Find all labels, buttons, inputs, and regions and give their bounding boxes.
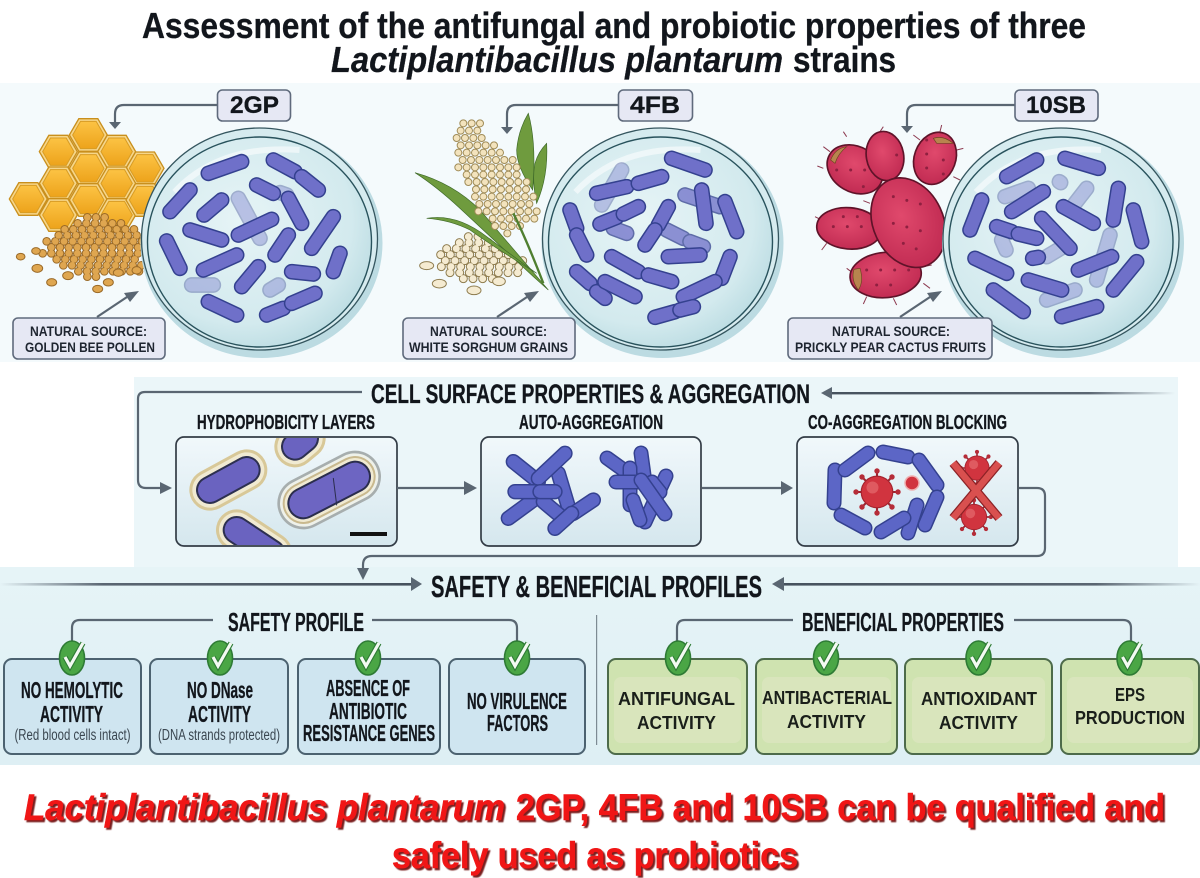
panel: hydrophobicity layers bbox=[176, 412, 397, 553]
card: no hemolytic activity: ACTIVITY bbox=[40, 701, 103, 727]
title: strains bbox=[793, 39, 896, 80]
arrow: source box to sorghum bbox=[497, 291, 539, 317]
label: natural source prickly pear cactus fruits: PRICKLY PEAR CACTUS FRUITS bbox=[795, 339, 986, 355]
icon: honeycomb bbox=[9, 119, 164, 231]
divider bbox=[596, 615, 597, 745]
conclusion text: Lactiplantibacillus plantarum bbox=[24, 787, 505, 828]
arrow: left into heading bbox=[0, 577, 422, 591]
card: no hemolytic activity: (Red blood cells intact) bbox=[14, 727, 130, 744]
conclusion text: safely used as probiotics bbox=[392, 835, 798, 876]
arrow: hydrophobicity to auto-aggregation bbox=[397, 481, 477, 495]
card: antibacterial activity bbox=[756, 659, 897, 754]
icon: petri dish 4FB bbox=[542, 128, 784, 358]
icon: check 3 bbox=[356, 641, 380, 675]
card: antibacterial activity: ANTIBACTERIAL bbox=[762, 688, 892, 708]
arrow: source box to cactus bbox=[900, 291, 942, 317]
bracket line bbox=[72, 620, 517, 644]
heading: CO-AGGREGATION BLOCKING bbox=[808, 412, 1007, 434]
heading: cell surface properties and aggregation: CELL SURFACE PROPERTIES & AGGREGATION bbox=[371, 379, 810, 409]
conclusion text: 2GP, 4FB and 10SB can be qualified and bbox=[516, 787, 1165, 828]
bacteria in dish 10SB bbox=[970, 158, 1142, 317]
heading: BENEFICIAL PROPERTIES bbox=[802, 607, 1004, 637]
arrow: auto-aggregation to co-aggregation bbox=[702, 481, 793, 495]
label: 2GP: 2GP bbox=[230, 92, 279, 119]
bacteria in dish 2GP bbox=[167, 160, 340, 315]
arrow: connector to safety section bbox=[357, 488, 1045, 580]
card: antioxidant activity: ANTIOXIDANT bbox=[921, 689, 1037, 709]
panel: beneficial properties bbox=[608, 607, 1199, 754]
card: no virulence factors: NO VIRULENCE bbox=[467, 688, 567, 714]
label: 2GP bbox=[218, 90, 290, 121]
scale bar bbox=[350, 532, 387, 536]
label: 10SB bbox=[1015, 90, 1098, 121]
card: no DNase activity: (DNA strands protected) bbox=[158, 727, 280, 744]
arrow: feed into hydrophobicity bbox=[138, 392, 362, 494]
icon: prickly pear cactus bbox=[815, 125, 964, 305]
icon: blocked pathogens with red cross bbox=[953, 450, 999, 536]
card: absence of antibiotic resistance genes: ANTIBIOTIC bbox=[329, 698, 407, 724]
label: 10SB: 10SB bbox=[1026, 92, 1086, 119]
title bbox=[142, 5, 1086, 80]
background: cell surface section bbox=[134, 377, 1178, 567]
card: EPS production bbox=[1061, 659, 1199, 754]
icon: bee pollen pile bbox=[16, 217, 144, 293]
label: natural source prickly pear cactus fruits bbox=[788, 318, 992, 359]
title: Assessment of the antifungal and probiotic properties of three bbox=[142, 5, 1086, 46]
icon: small pathogen bbox=[905, 476, 919, 490]
card: antioxidant activity: ACTIVITY bbox=[939, 713, 1018, 733]
heading: HYDROPHOBICITY LAYERS bbox=[197, 412, 375, 434]
card: antifungal activity: ANTIFUNGAL bbox=[618, 689, 735, 709]
icon: check 1 bbox=[60, 641, 84, 675]
arrow: source box to pollen bbox=[97, 291, 139, 317]
icon: petri dish 2GP bbox=[140, 128, 382, 358]
icon: check 8 bbox=[1117, 641, 1142, 675]
card: no DNase activity: NO DNase bbox=[187, 677, 253, 703]
panel: auto-aggregation bbox=[481, 412, 701, 546]
background: safety section bbox=[0, 567, 1200, 765]
card: antifungal activity: ACTIVITY bbox=[637, 713, 716, 733]
arrow: feed from right into heading bbox=[821, 387, 1175, 399]
panel: strain 2GP bbox=[9, 90, 382, 359]
icon: check 6 bbox=[814, 641, 838, 675]
label: natural source golden bee pollen: NATURAL SOURCE: bbox=[30, 323, 147, 339]
card: absence of antibiotic resistance genes bbox=[298, 659, 440, 754]
label: natural source white sorghum grains: WHITE SORGHUM GRAINS bbox=[409, 339, 568, 355]
arrow: 4FB label to source bbox=[501, 105, 618, 134]
title: Lactiplantibacillus plantarum bbox=[331, 39, 783, 80]
box border bbox=[176, 437, 397, 546]
card: antibacterial activity: ACTIVITY bbox=[787, 712, 866, 732]
bracket line bbox=[677, 620, 1131, 644]
heading: AUTO-AGGREGATION bbox=[519, 412, 663, 434]
arrow: 10SB label to source bbox=[901, 105, 1015, 133]
illustration: bacteria with hydrophobic layers bbox=[210, 438, 355, 553]
arrow: 2GP label to source bbox=[109, 105, 217, 129]
panel: safety profile bbox=[4, 607, 585, 754]
label: 4FB bbox=[618, 90, 692, 121]
panel: co-aggregation blocking bbox=[797, 412, 1018, 546]
icon: petri dish 10SB bbox=[942, 128, 1184, 358]
card: no virulence factors: FACTORS bbox=[487, 710, 548, 736]
background: top band bbox=[0, 83, 1200, 362]
label: 4FB: 4FB bbox=[630, 92, 680, 119]
arrow: right into heading bbox=[772, 577, 1200, 591]
card: EPS production: PRODUCTION bbox=[1075, 708, 1185, 728]
illustration: aggregated rods left bbox=[508, 453, 593, 528]
bacteria in dish 4FB bbox=[570, 158, 737, 317]
card: no virulence factors bbox=[449, 659, 585, 754]
panel: strain 4FB bbox=[403, 90, 784, 359]
card: no hemolytic activity: NO HEMOLYTIC bbox=[21, 677, 123, 703]
box bbox=[797, 437, 1018, 546]
panel: strain 10SB bbox=[788, 90, 1184, 359]
card: absence of antibiotic resistance genes: RESISTANCE GENES bbox=[303, 720, 435, 746]
icon: check 7 bbox=[966, 641, 991, 675]
icon: trapped pathogen bbox=[853, 468, 901, 516]
label: natural source white sorghum grains: NATURAL SOURCE: bbox=[430, 323, 547, 339]
icon: check 2 bbox=[208, 641, 232, 675]
illustration: aggregated rods right bbox=[607, 453, 666, 522]
heading: safety and beneficial profiles: SAFETY & BENEFICIAL PROFILES bbox=[431, 569, 762, 604]
label: natural source white sorghum grains bbox=[403, 318, 575, 359]
icon: sorghum plant bbox=[415, 113, 548, 295]
icon: check 5 bbox=[666, 641, 690, 675]
label: natural source golden bee pollen: GOLDEN BEE POLLEN bbox=[25, 339, 155, 355]
box bbox=[481, 437, 701, 546]
card: antioxidant activity bbox=[905, 659, 1052, 754]
card: absence of antibiotic resistance genes: ABSENCE OF bbox=[326, 675, 410, 701]
heading: SAFETY PROFILE bbox=[228, 607, 364, 637]
label: natural source golden bee pollen bbox=[13, 318, 165, 359]
label: natural source prickly pear cactus fruits: NATURAL SOURCE: bbox=[832, 323, 950, 339]
card: no hemolytic activity bbox=[4, 659, 141, 754]
card: no DNase activity bbox=[150, 659, 288, 754]
illustration: rods surrounding pathogen bbox=[834, 452, 937, 533]
box bbox=[176, 437, 397, 546]
card: EPS production: EPS bbox=[1115, 685, 1145, 705]
icon: check 4 bbox=[504, 641, 530, 675]
conclusion text bbox=[24, 787, 1165, 876]
card: no DNase activity: ACTIVITY bbox=[188, 701, 251, 727]
card: antifungal activity bbox=[608, 659, 747, 754]
